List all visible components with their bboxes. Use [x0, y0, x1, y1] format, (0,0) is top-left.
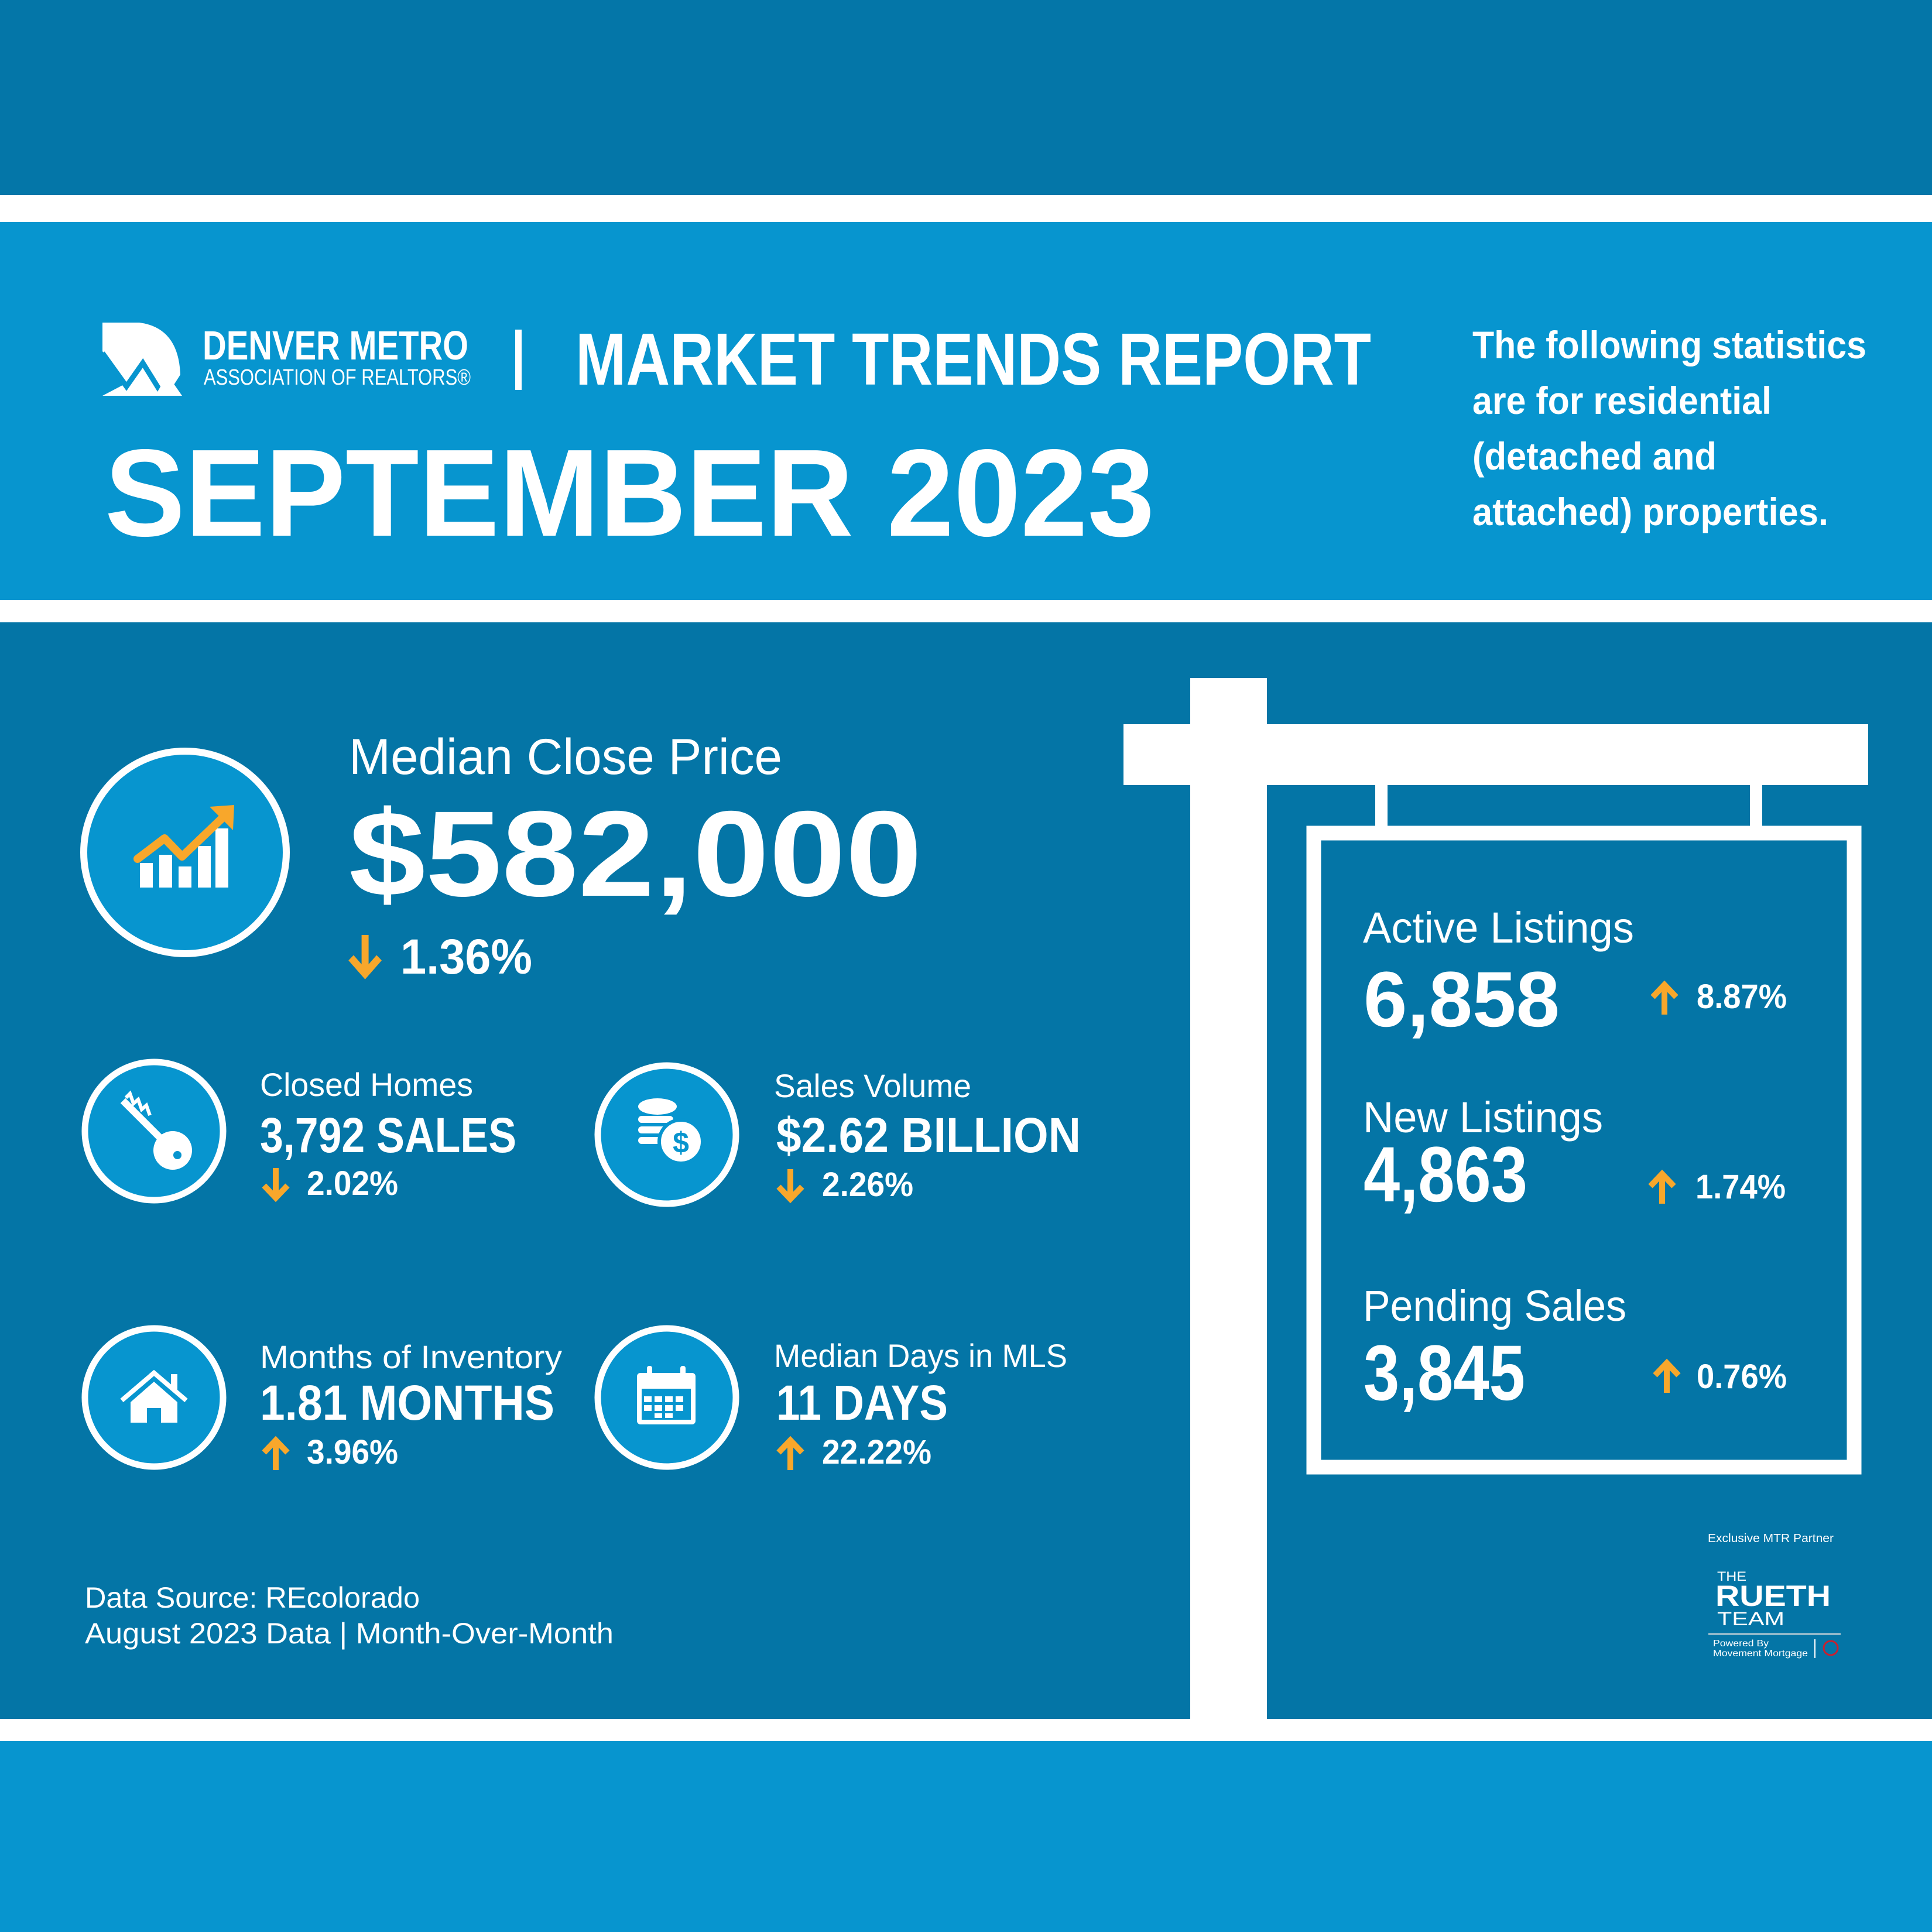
- data source note: [85, 1581, 614, 1650]
- icon: house: [85, 1328, 223, 1467]
- sign stat: active listings: Active Listings: [1363, 903, 1634, 952]
- intro text: are for residential: [1472, 379, 1772, 422]
- sign stat: new listings: 1.74%: [1695, 1168, 1786, 1206]
- stat: sales volume: 2.26%: [822, 1166, 913, 1204]
- stat: months of inventory: 3.96%: [307, 1433, 398, 1471]
- sign stat: new listings: New Listings: [1363, 1093, 1603, 1142]
- stat: median days in mls: 11 DAYS: [776, 1375, 948, 1430]
- stat: closed homes: [85, 1062, 516, 1203]
- partner logo: TEAM: [1717, 1608, 1784, 1629]
- stat: median days in mls: Median Days in MLS: [774, 1337, 1067, 1374]
- stat: median close price: Median Close Price: [349, 729, 782, 785]
- intro text: [1472, 323, 1866, 533]
- header logo: ASSOCIATION OF REALTORS®: [204, 365, 471, 390]
- divider: [515, 330, 522, 390]
- stat: closed homes: 2.02%: [307, 1164, 398, 1203]
- data source note: August 2023 Data | Month-Over-Month: [85, 1617, 614, 1650]
- stat: months of inventory: 1.81 MONTHS: [260, 1375, 554, 1430]
- sign post: [1123, 678, 1868, 1741]
- stat: median days in mls: 22.22%: [822, 1433, 931, 1471]
- sign stat: new listings: [1363, 1093, 1786, 1218]
- sign stat: new listings: 4,863: [1364, 1131, 1527, 1218]
- partner logo: Powered By: [1713, 1639, 1769, 1649]
- stat: median close price: 1.36%: [400, 929, 532, 984]
- sign stat: pending sales: Pending Sales: [1363, 1282, 1626, 1330]
- partner logo: Exclusive MTR Partner: [1708, 1532, 1834, 1545]
- stat: sales volume: $2.62 BILLION: [776, 1108, 1081, 1163]
- partner logo: RUETH: [1715, 1580, 1831, 1612]
- stat: closed homes: 3,792 SALES: [260, 1108, 516, 1163]
- stat: median close price: $582,000: [349, 786, 922, 922]
- header logo: [102, 323, 471, 396]
- stat: median close price: [84, 729, 922, 984]
- icon: calendar: [598, 1328, 736, 1467]
- icon: chart: [84, 751, 286, 954]
- sign stat: active listings: 8.87%: [1697, 978, 1787, 1016]
- stat: sales volume: Sales Volume: [774, 1067, 971, 1104]
- intro text: The following statistics: [1472, 323, 1866, 366]
- stat: months of inventory: [85, 1328, 562, 1471]
- sign board: [1314, 833, 1854, 1467]
- icon: coins: $: [673, 1126, 689, 1159]
- intro text: (detached and: [1472, 434, 1717, 478]
- icon: key: [85, 1062, 223, 1200]
- stat: closed homes: Closed Homes: [260, 1066, 473, 1103]
- partner logo: THE: [1717, 1569, 1746, 1584]
- stat: median days in mls: [598, 1328, 1067, 1471]
- sign stat: pending sales: 0.76%: [1697, 1358, 1787, 1396]
- title: september 2023: SEPTEMBER 2023: [105, 423, 1155, 562]
- header logo: DENVER METRO: [203, 323, 468, 368]
- title: market trends report: MARKET TRENDS REPORT: [576, 318, 1371, 400]
- stat: sales volume: [598, 1066, 1081, 1204]
- sign stat: pending sales: [1363, 1282, 1787, 1417]
- sign stat: active listings: 6,858: [1364, 956, 1560, 1043]
- partner logo: Movement Mortgage: [1713, 1649, 1808, 1659]
- data source note: Data Source: REcolorado: [85, 1581, 420, 1614]
- stat: months of inventory: Months of Inventory: [260, 1338, 562, 1375]
- sign stat: active listings: [1363, 903, 1787, 1043]
- partner logo: [1708, 1532, 1841, 1659]
- icon: coins: [598, 1066, 736, 1204]
- intro text: attached) properties.: [1472, 490, 1828, 533]
- sign stat: pending sales: 3,845: [1364, 1330, 1525, 1417]
